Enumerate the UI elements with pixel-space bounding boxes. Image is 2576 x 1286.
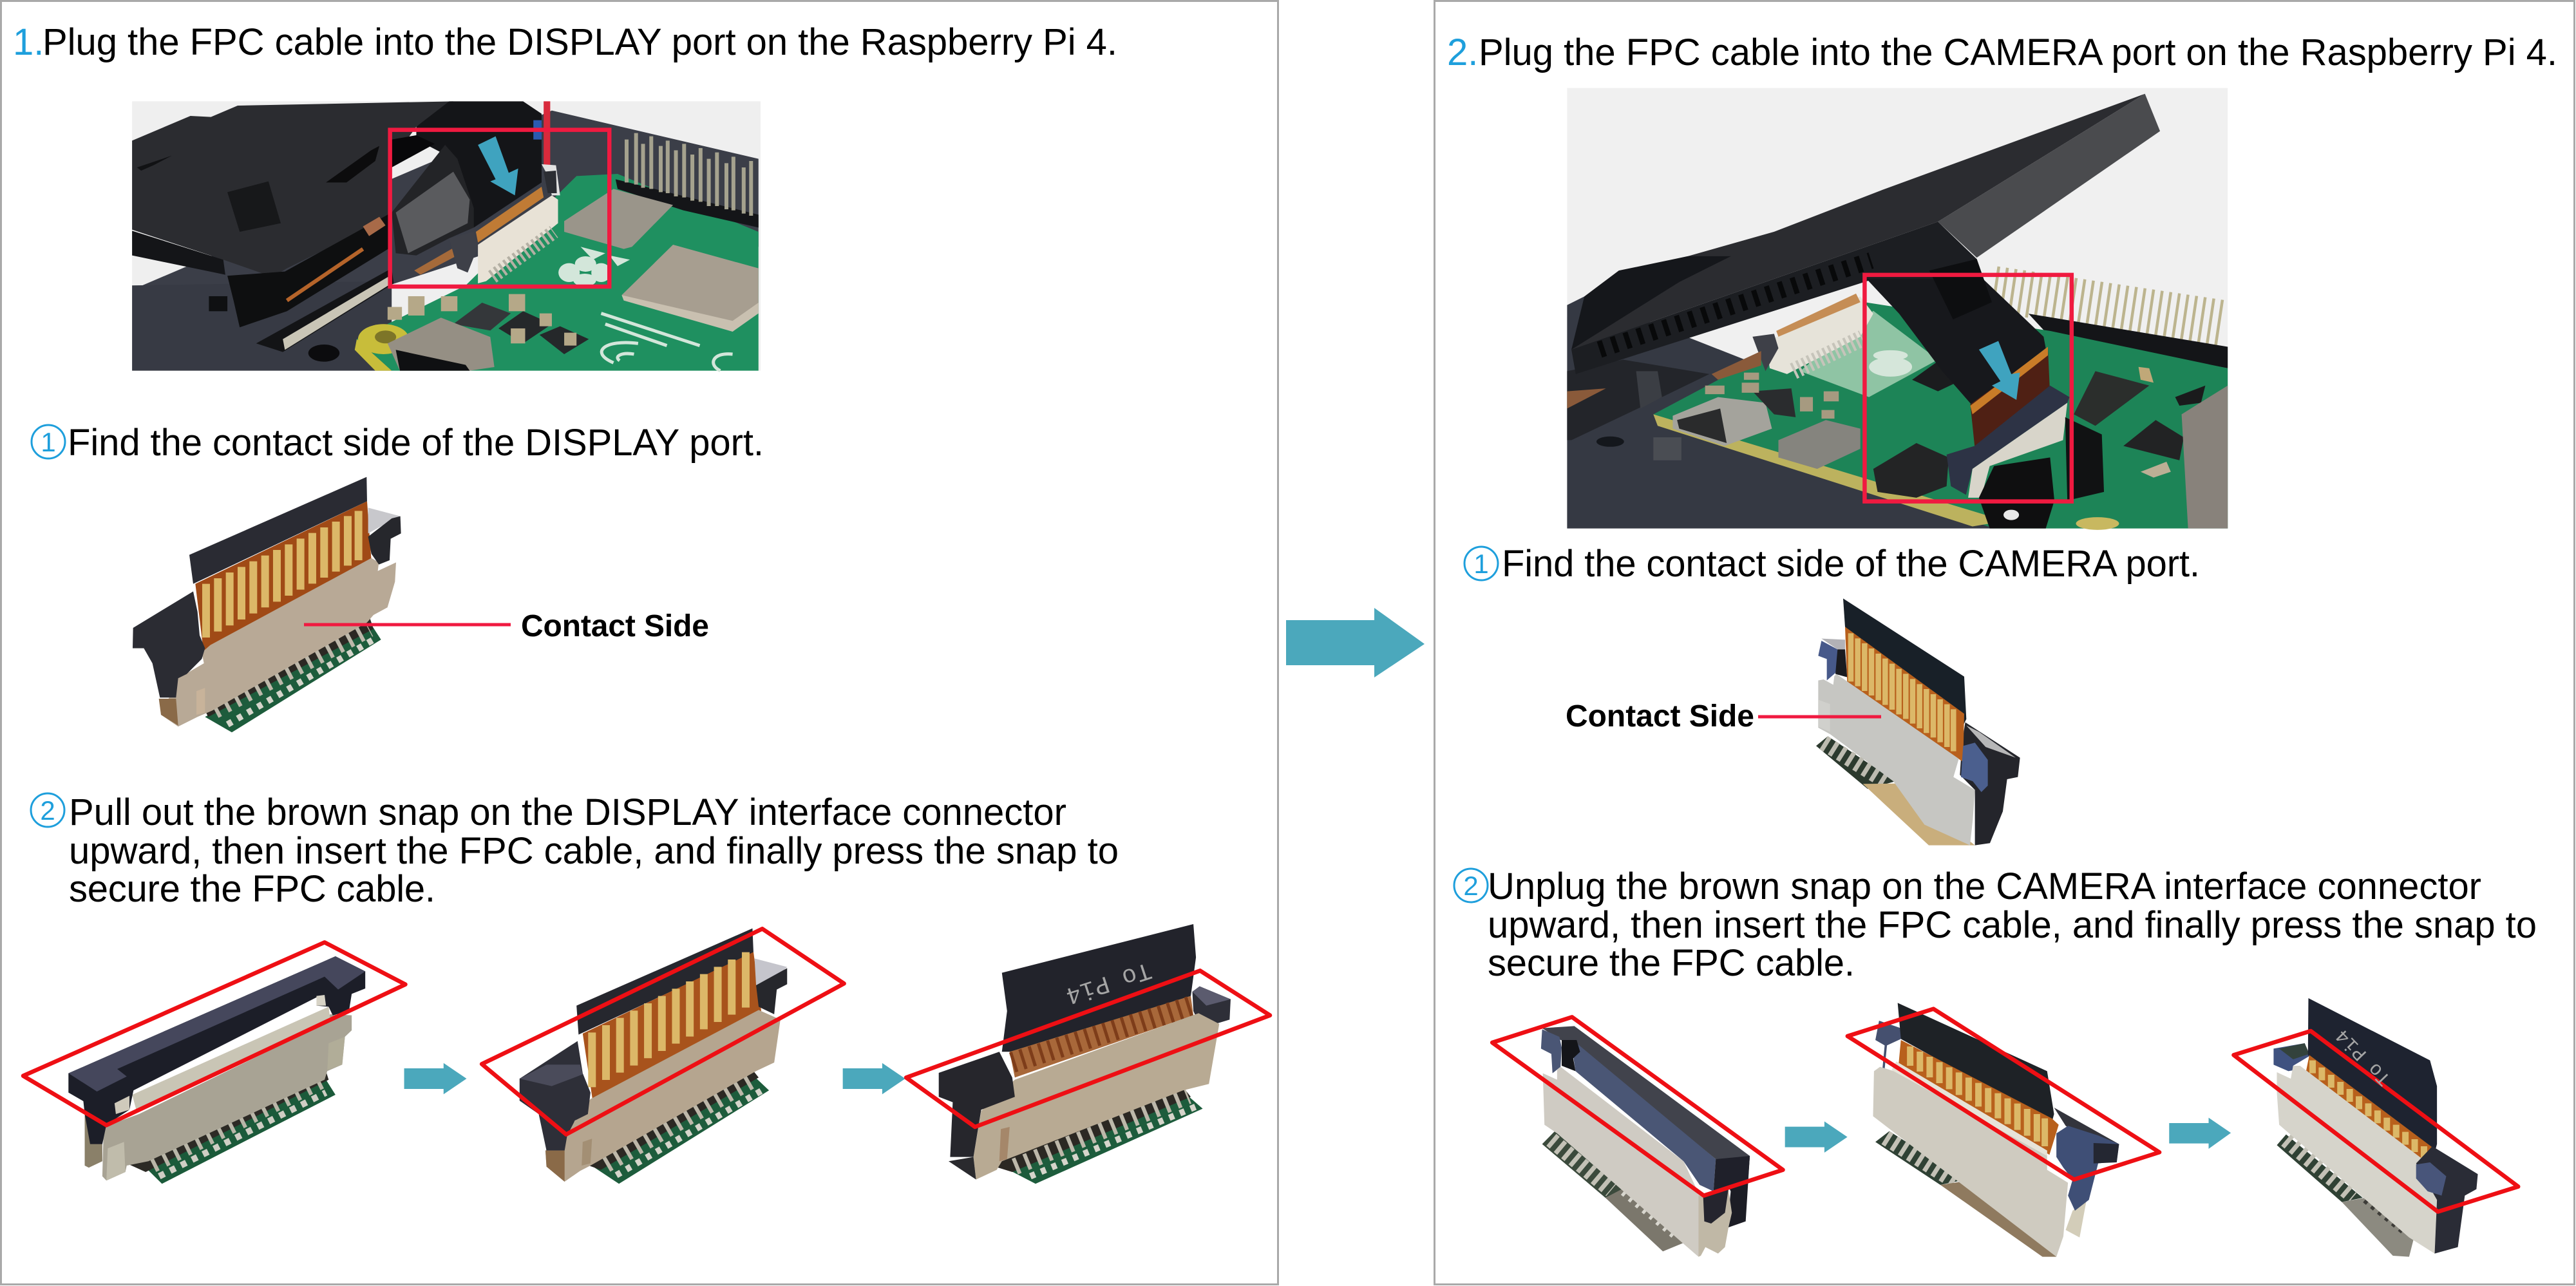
arrow: from step 1 to step 2 <box>1286 608 1425 677</box>
callout: contact side leader line: Contact Side <box>521 609 709 643</box>
step 2.2 instruction: upward, then insert the FPC cable, and finally press the snap to <box>1488 904 2537 946</box>
heading: step 1: 1. <box>13 21 44 63</box>
panel: step 1 DISPLAY port <box>1 1 1278 1284</box>
heading: step 1: Plug the FPC cable into the DISPLAY port on the Raspberry Pi 4. <box>43 21 1117 63</box>
step 1.2 instruction: secure the FPC cable. <box>69 868 435 910</box>
arrow <box>404 1063 466 1094</box>
cable label: To Pi4 <box>2332 1024 2396 1090</box>
connector: DISPLAY contact side <box>133 477 401 732</box>
arrow <box>843 1063 905 1094</box>
step 1.2 instruction <box>31 791 1119 910</box>
step 2.2 instruction: Unplug the brown snap on the CAMERA interface connector <box>1488 865 2481 907</box>
connector: FPC inserted <box>482 929 844 1184</box>
step 2.2 instruction <box>1454 865 2537 984</box>
connector: CAMERA contact side <box>1816 598 2020 846</box>
step 1.2 instruction: 2 <box>40 795 55 826</box>
connector: snap open <box>23 942 405 1184</box>
step 2.2 instruction: secure the FPC cable. <box>1488 942 1855 984</box>
connector: snap closed <box>906 924 1270 1184</box>
step 2.2 instruction: 2 <box>1463 871 1479 901</box>
connector: camera FPC inserted <box>1848 1003 2159 1257</box>
step 1.2 instruction: upward, then insert the FPC cable, and finally press the snap to <box>69 830 1119 872</box>
photo: FPC cable in DISPLAY port <box>132 101 761 371</box>
step 1.2 instruction: Pull out the brown snap on the DISPLAY interface connector <box>69 791 1066 833</box>
connector: camera snap open <box>1492 1017 1783 1257</box>
photo: FPC cable in CAMERA port <box>1567 88 2228 530</box>
cable label: To Pi4 <box>1062 955 1155 1009</box>
heading: step 2: 2. <box>1447 32 1478 73</box>
step 2.1 instruction: 1 <box>1473 549 1489 579</box>
callout: contact side leader line: Contact Side <box>1566 699 1754 733</box>
step 1.1 instruction: Find the contact side of the DISPLAY port. <box>68 422 764 464</box>
step 2.1 instruction: Find the contact side of the CAMERA port. <box>1502 543 2200 585</box>
heading: step 2: Plug the FPC cable into the CAMERA port on the Raspberry Pi 4. <box>1479 32 2557 73</box>
panel: step 2 CAMERA port <box>1435 1 2575 1284</box>
arrow <box>2169 1118 2231 1149</box>
arrow <box>1785 1121 1848 1153</box>
connector: camera snap closed <box>2233 998 2518 1257</box>
step 1.1 instruction: 1 <box>41 427 56 457</box>
